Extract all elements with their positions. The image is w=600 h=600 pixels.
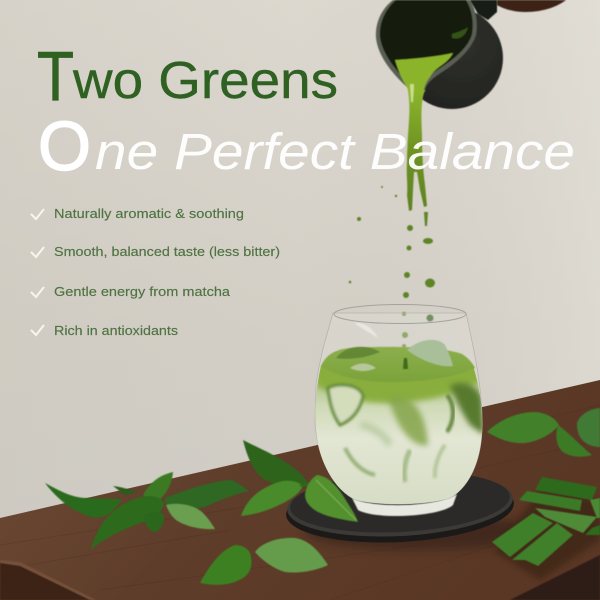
left leaf cluster — [45, 472, 249, 550]
wooden table — [0, 380, 600, 600]
benefit 2: Smooth, balanced taste (less bitter) — [54, 244, 280, 259]
title line 2: ne Perfect Balance — [95, 123, 575, 180]
floating ice cube — [407, 340, 453, 366]
foam surface — [321, 347, 475, 382]
front leaves — [200, 538, 328, 585]
glass rim — [334, 304, 466, 324]
benefit 4: Rich in antioxidants — [54, 323, 179, 338]
leaves on plate — [241, 440, 358, 522]
matcha stream — [407, 84, 427, 211]
glass of iced matcha latte — [310, 304, 490, 516]
pandan leaves — [492, 477, 600, 580]
benefit 1: Naturally aromatic & soothing — [54, 206, 244, 221]
hand holding jug — [497, 0, 566, 12]
plate — [284, 466, 535, 550]
right leaves — [487, 408, 600, 457]
title line 1 — [37, 37, 338, 115]
title line 2: O — [38, 107, 91, 185]
pouring jug — [376, 0, 503, 109]
latte — [315, 366, 482, 504]
title line 1: T — [37, 37, 74, 115]
matcha droplets — [349, 186, 435, 348]
title line 2 — [38, 107, 575, 185]
title line 1: wo Greens — [72, 52, 338, 110]
benefit 3: Gentle energy from matcha — [54, 284, 231, 299]
glass bowl — [315, 313, 482, 504]
droplet entering latte — [403, 358, 408, 369]
glass base — [352, 494, 457, 516]
benefits list — [31, 206, 280, 338]
